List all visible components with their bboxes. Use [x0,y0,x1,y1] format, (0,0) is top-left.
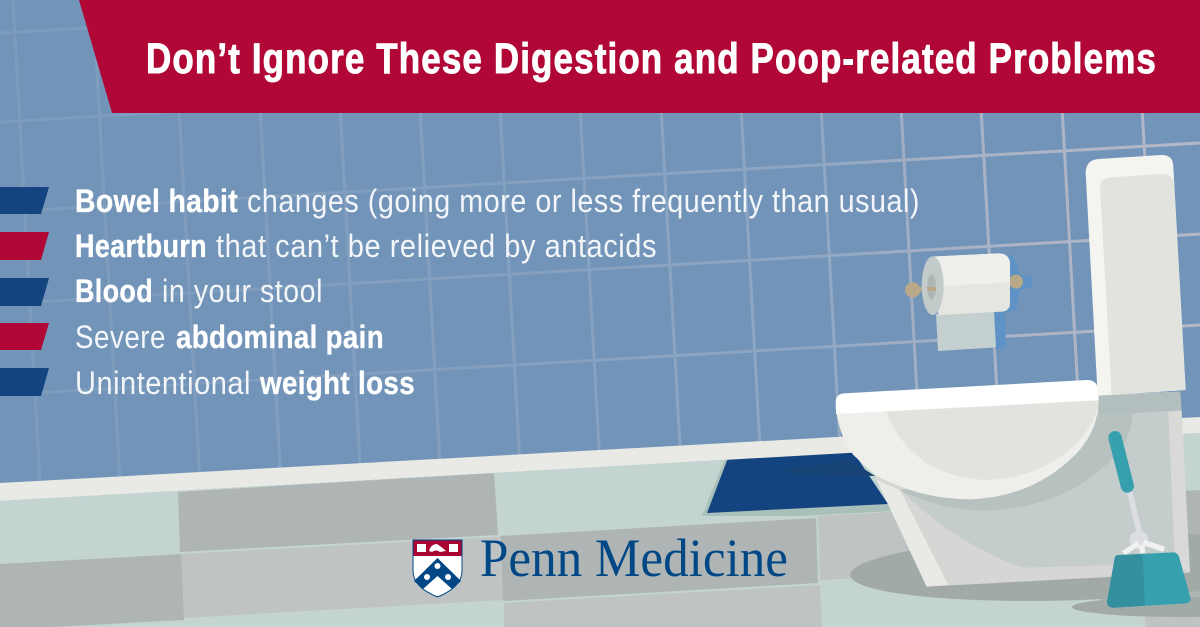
list item: heartburn: that can’t be relieved by antacids [216,228,657,264]
toilet seat [836,380,1099,414]
baseboard [0,417,1200,501]
pedestal [875,392,1190,587]
floor [0,433,1200,627]
title banner [79,0,1200,113]
bullet [0,232,49,260]
bath mat [702,450,892,516]
brush handle [1115,438,1127,486]
list item: blood: in your stool [162,273,323,309]
bullet [0,278,49,306]
toilet [836,155,1190,587]
roll body [922,253,1010,315]
bowl shadow [900,413,1133,511]
list item: weight loss: weight loss [259,365,415,401]
bullet [0,368,49,396]
holder bracket [1002,254,1033,313]
floor shadow of brush [1072,597,1200,617]
bowl [837,399,1099,499]
bullet [0,187,49,214]
list item: heartburn: Heartburn [75,228,207,264]
holder knobs [905,275,1023,298]
list item: abdominal pain: abdominal pain [176,319,384,355]
list item: blood [0,273,323,309]
tank [1086,155,1186,396]
brush shaft and bristles [1123,490,1164,553]
bullet [0,323,49,350]
wall tile grid [0,0,1200,500]
floor shadow of toilet [849,526,1200,608]
list item: heartburn [0,228,657,264]
list item: bowel habit: Bowel habit [75,183,238,219]
list item: blood: Blood [75,273,153,309]
list item: weight loss [0,365,415,401]
list item: abdominal pain [0,319,384,355]
list item: weight loss: Unintentional [75,365,251,401]
toilet brush [1107,438,1191,608]
list item: bowel habit: changes (going more or less frequently than usual) [247,183,920,219]
list item: bowel habit [0,183,920,219]
paper sheet [936,311,1006,351]
toilet paper roll [905,253,1033,351]
logo: Penn Medicine wordmark: Penn Medicine [480,528,788,588]
list item: abdominal pain: Severe [75,319,166,355]
brush holder [1107,552,1191,608]
logo: Penn shield [413,540,462,597]
